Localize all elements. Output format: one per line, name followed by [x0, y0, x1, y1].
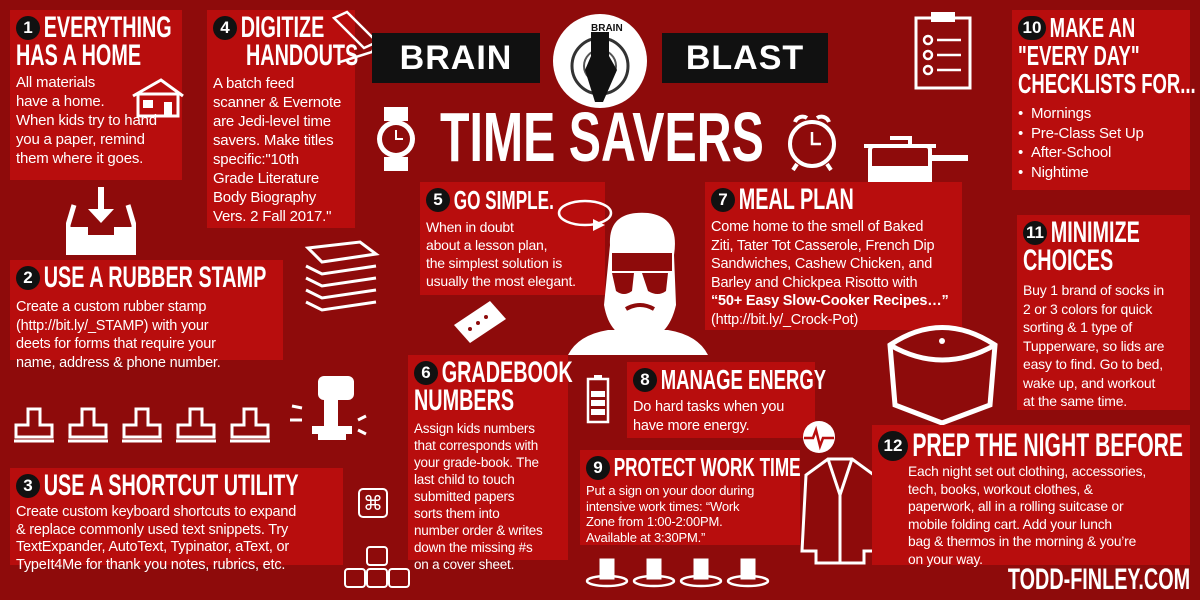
text 3: [16, 504, 337, 574]
icon: tupperware: [887, 325, 998, 425]
icon: command key: [358, 488, 388, 518]
text 5: [426, 219, 576, 289]
text 4: A batch feed: [213, 75, 294, 92]
text 7: Sandwiches, Cashew Chicken, and: [711, 256, 932, 272]
text 8: Do hard tasks when you: [633, 399, 784, 415]
panel 5: go simple: [420, 182, 605, 295]
heading 4: 4: [220, 18, 230, 37]
heading 10: [1018, 12, 1196, 99]
logo circle: [553, 14, 647, 108]
heading 10: CHECKLISTS FOR...: [1018, 68, 1196, 99]
icon: bearded man: [568, 212, 708, 355]
heading 3: [16, 472, 337, 500]
text 6: sorts them into: [414, 506, 500, 521]
heading 4: [213, 11, 358, 72]
heading 1: [16, 11, 172, 72]
heading 6: NUMBERS: [414, 384, 514, 417]
panel 4: digitize handouts: [207, 10, 355, 228]
heading 3: 3: [23, 476, 33, 495]
blast label: BLAST: [686, 39, 804, 77]
text 7: Barley and Chickpea Risotto with: [711, 274, 917, 290]
heading 6: 6: [421, 363, 431, 382]
logo circle: BRAIN: [591, 23, 623, 34]
text 9: [586, 483, 754, 544]
brain label: [372, 33, 540, 83]
text 8: [633, 399, 784, 434]
text 1: All materials: [16, 74, 95, 91]
icons: stamp row: [14, 408, 270, 442]
icons: towers row: [586, 558, 770, 588]
heading 8: MANAGE ENERGY: [661, 364, 826, 395]
icon: jacket: [800, 455, 880, 565]
text 6: on a cover sheet.: [414, 557, 514, 572]
heading 4: HANDOUTS: [246, 39, 358, 72]
heading 4: DIGITIZE: [241, 11, 324, 44]
panel 2: rubber stamp: [10, 260, 283, 360]
text 5: about a lesson plan,: [426, 237, 547, 253]
heading 11: [1023, 216, 1140, 277]
heading 10: 10: [1023, 18, 1041, 37]
text 11: Buy 1 brand of socks in: [1023, 282, 1164, 298]
heading 10: "EVERY DAY": [1018, 40, 1140, 71]
heading 7: 7: [718, 190, 728, 209]
text 4: Grade Literature: [213, 170, 319, 187]
text 11: Tupperware, so lids are: [1023, 338, 1164, 354]
panel 10: every day checklists: [1012, 10, 1190, 190]
heading 11: CHOICES: [1023, 244, 1113, 277]
text 4: are Jedi-level time: [213, 113, 331, 130]
heading 6: [414, 356, 573, 417]
heading 2: 2: [23, 268, 33, 287]
text 5: When in doubt: [426, 219, 514, 235]
heading 11: 11: [1026, 223, 1044, 242]
icon: inbox tray: [66, 187, 136, 255]
text 6: Assign kids numbers: [414, 421, 535, 436]
heading 11: MINIMIZE: [1051, 216, 1140, 249]
text 4: savers. Make titles: [213, 132, 333, 149]
text 2: Create a custom rubber stamp: [16, 299, 206, 315]
checklist items: • After-School: [1018, 144, 1111, 161]
text 3: TextExpander, AutoText, Typinator, aText, or: [16, 539, 289, 555]
text 12: [878, 463, 1184, 568]
heading 12: PREP THE NIGHT BEFORE: [912, 427, 1183, 463]
icon: paper stack: [304, 240, 380, 312]
text 2: (http://bit.ly/_STAMP) with your: [16, 318, 208, 334]
text 9: Put a sign on your door during: [586, 483, 754, 498]
text 6: down the missing #s: [414, 540, 533, 555]
text 9: Available at 3:30PM.”: [586, 530, 705, 544]
text 11: sorting & 1 type of: [1023, 319, 1132, 335]
icon: house: [132, 78, 184, 118]
icon: battery: [586, 375, 610, 424]
heading 8: 8: [640, 370, 650, 389]
banner: brain blast: [372, 33, 828, 83]
text 12: mobile folding cart. Add your lunch: [908, 516, 1112, 532]
icon: scanner: [332, 10, 372, 64]
heading 1: HAS A HOME: [16, 39, 141, 72]
text 11: at the same time.: [1023, 393, 1127, 409]
text 12: Each night set out clothing, accessories,: [908, 464, 1146, 479]
text 3: & replace commonly used text snippets. Try: [16, 522, 288, 538]
text 4: specific:"10th: [213, 151, 299, 168]
text 6: your grade-book. The: [414, 455, 539, 470]
text 6: that corresponds with: [414, 438, 538, 453]
heading 1: EVERYTHING: [44, 11, 172, 44]
text 6: number order & writes: [414, 523, 543, 538]
text 9: intensive work times: “Work: [586, 498, 739, 514]
text 3: TypeIt4Me for thank you notes, rubrics, etc.: [16, 556, 285, 572]
text 7: “50+ Easy Slow-Cooker Recipes…”: [711, 293, 949, 309]
heading 3: USE A SHORTCUT UTILITY: [44, 469, 299, 502]
text 4: [213, 75, 341, 225]
text 5: the simplest solution is: [426, 255, 562, 271]
panel 6: gradebook numbers: [408, 355, 568, 560]
text 11: 2 or 3 colors for quick: [1023, 300, 1152, 316]
text 7: Come home to the smell of Baked: [711, 219, 923, 235]
icon: calculator: [454, 301, 506, 343]
text 7: [711, 219, 949, 328]
icon: alarm clock: [788, 114, 836, 172]
heading 9: 9: [593, 458, 603, 477]
panel 1: everything has a home: [10, 10, 182, 180]
icon: clipboard: [914, 12, 972, 90]
icon: socks: [1128, 222, 1184, 277]
blast label: [662, 33, 828, 83]
heading 6: GRADEBOOK: [442, 356, 573, 389]
heading 5: GO SIMPLE.: [454, 185, 554, 215]
text 1: [16, 74, 157, 167]
heading 7: MEAL PLAN: [739, 183, 854, 216]
text 1: When kids try to hand: [16, 112, 157, 129]
icon: fist stamping: [290, 376, 367, 440]
checklist items: • Mornings: [1018, 105, 1091, 122]
brain label: BRAIN: [400, 39, 512, 77]
text 12: tech, books, workout clothes, &: [908, 482, 1093, 496]
icon: command key: ⌘: [363, 491, 383, 515]
text 9: Zone from 1:00-2:00PM.: [586, 514, 722, 529]
text 1: them where it goes.: [16, 150, 143, 167]
heading 2: USE A RUBBER STAMP: [44, 261, 266, 294]
text 6: [414, 421, 543, 572]
text 7: (http://bit.ly/_Crock-Pot): [711, 312, 858, 328]
text 2: name, address & phone number.: [16, 354, 221, 370]
text 7: Ziti, Tater Tot Casserole, French Dip: [711, 238, 934, 254]
text 3: Create custom keyboard shortcuts to expand: [16, 504, 296, 520]
checklist items: • Pre-Class Set Up: [1018, 124, 1144, 142]
heading 5: 5: [433, 190, 443, 209]
text 11: [1023, 282, 1164, 409]
text 6: submitted papers: [414, 489, 514, 504]
text 6: last child to touch: [414, 472, 515, 487]
text 12: paperwork, all in a rolling suitcase or: [908, 499, 1123, 514]
checklist items: [1018, 105, 1144, 180]
panel 9: protect work time: [580, 450, 800, 545]
text 12: bag & thermos in the morning & you’re: [908, 534, 1136, 549]
text 12: on your way.: [908, 552, 983, 566]
panel 3: shortcut utility: [10, 468, 343, 565]
heading 12: 12: [884, 436, 902, 455]
icon: watch: [377, 107, 415, 171]
text 2: deets for forms that require your: [16, 336, 216, 352]
text 11: wake up, and workout: [1023, 374, 1155, 390]
panel 12: prep the night before: [872, 425, 1190, 565]
title: time savers: TIME SAVERS: [440, 98, 764, 176]
text 2: [16, 299, 221, 370]
icon: heartbeat: [803, 421, 835, 453]
text 1: you a paper, remind: [16, 131, 145, 148]
footer: todd-finley.com: TODD-FINLEY.COM: [1008, 563, 1190, 596]
text 1: have a home.: [16, 93, 104, 110]
text 11: easy to find. Go to bed,: [1023, 356, 1163, 372]
text 5: usually the most elegant.: [426, 273, 576, 289]
text 4: Vers. 2 Fall 2017.": [213, 208, 331, 225]
panel 8: manage energy: [627, 362, 815, 438]
heading 10: MAKE AN: [1050, 12, 1135, 43]
checklist items: • Nightime: [1018, 164, 1089, 180]
heading 9: PROTECT WORK TIME: [614, 452, 801, 482]
text 4: Body Biography: [213, 189, 316, 206]
panel 11: minimize choices: [1017, 215, 1190, 410]
icon: circular arrow: [558, 200, 612, 231]
text 4: scanner & Evernote: [213, 94, 341, 111]
icon: arrow keys: [343, 545, 413, 590]
icon: pot: [864, 136, 968, 182]
text 8: have more energy.: [633, 418, 749, 434]
heading 1: 1: [23, 18, 33, 37]
panel 7: meal plan: [705, 182, 962, 330]
